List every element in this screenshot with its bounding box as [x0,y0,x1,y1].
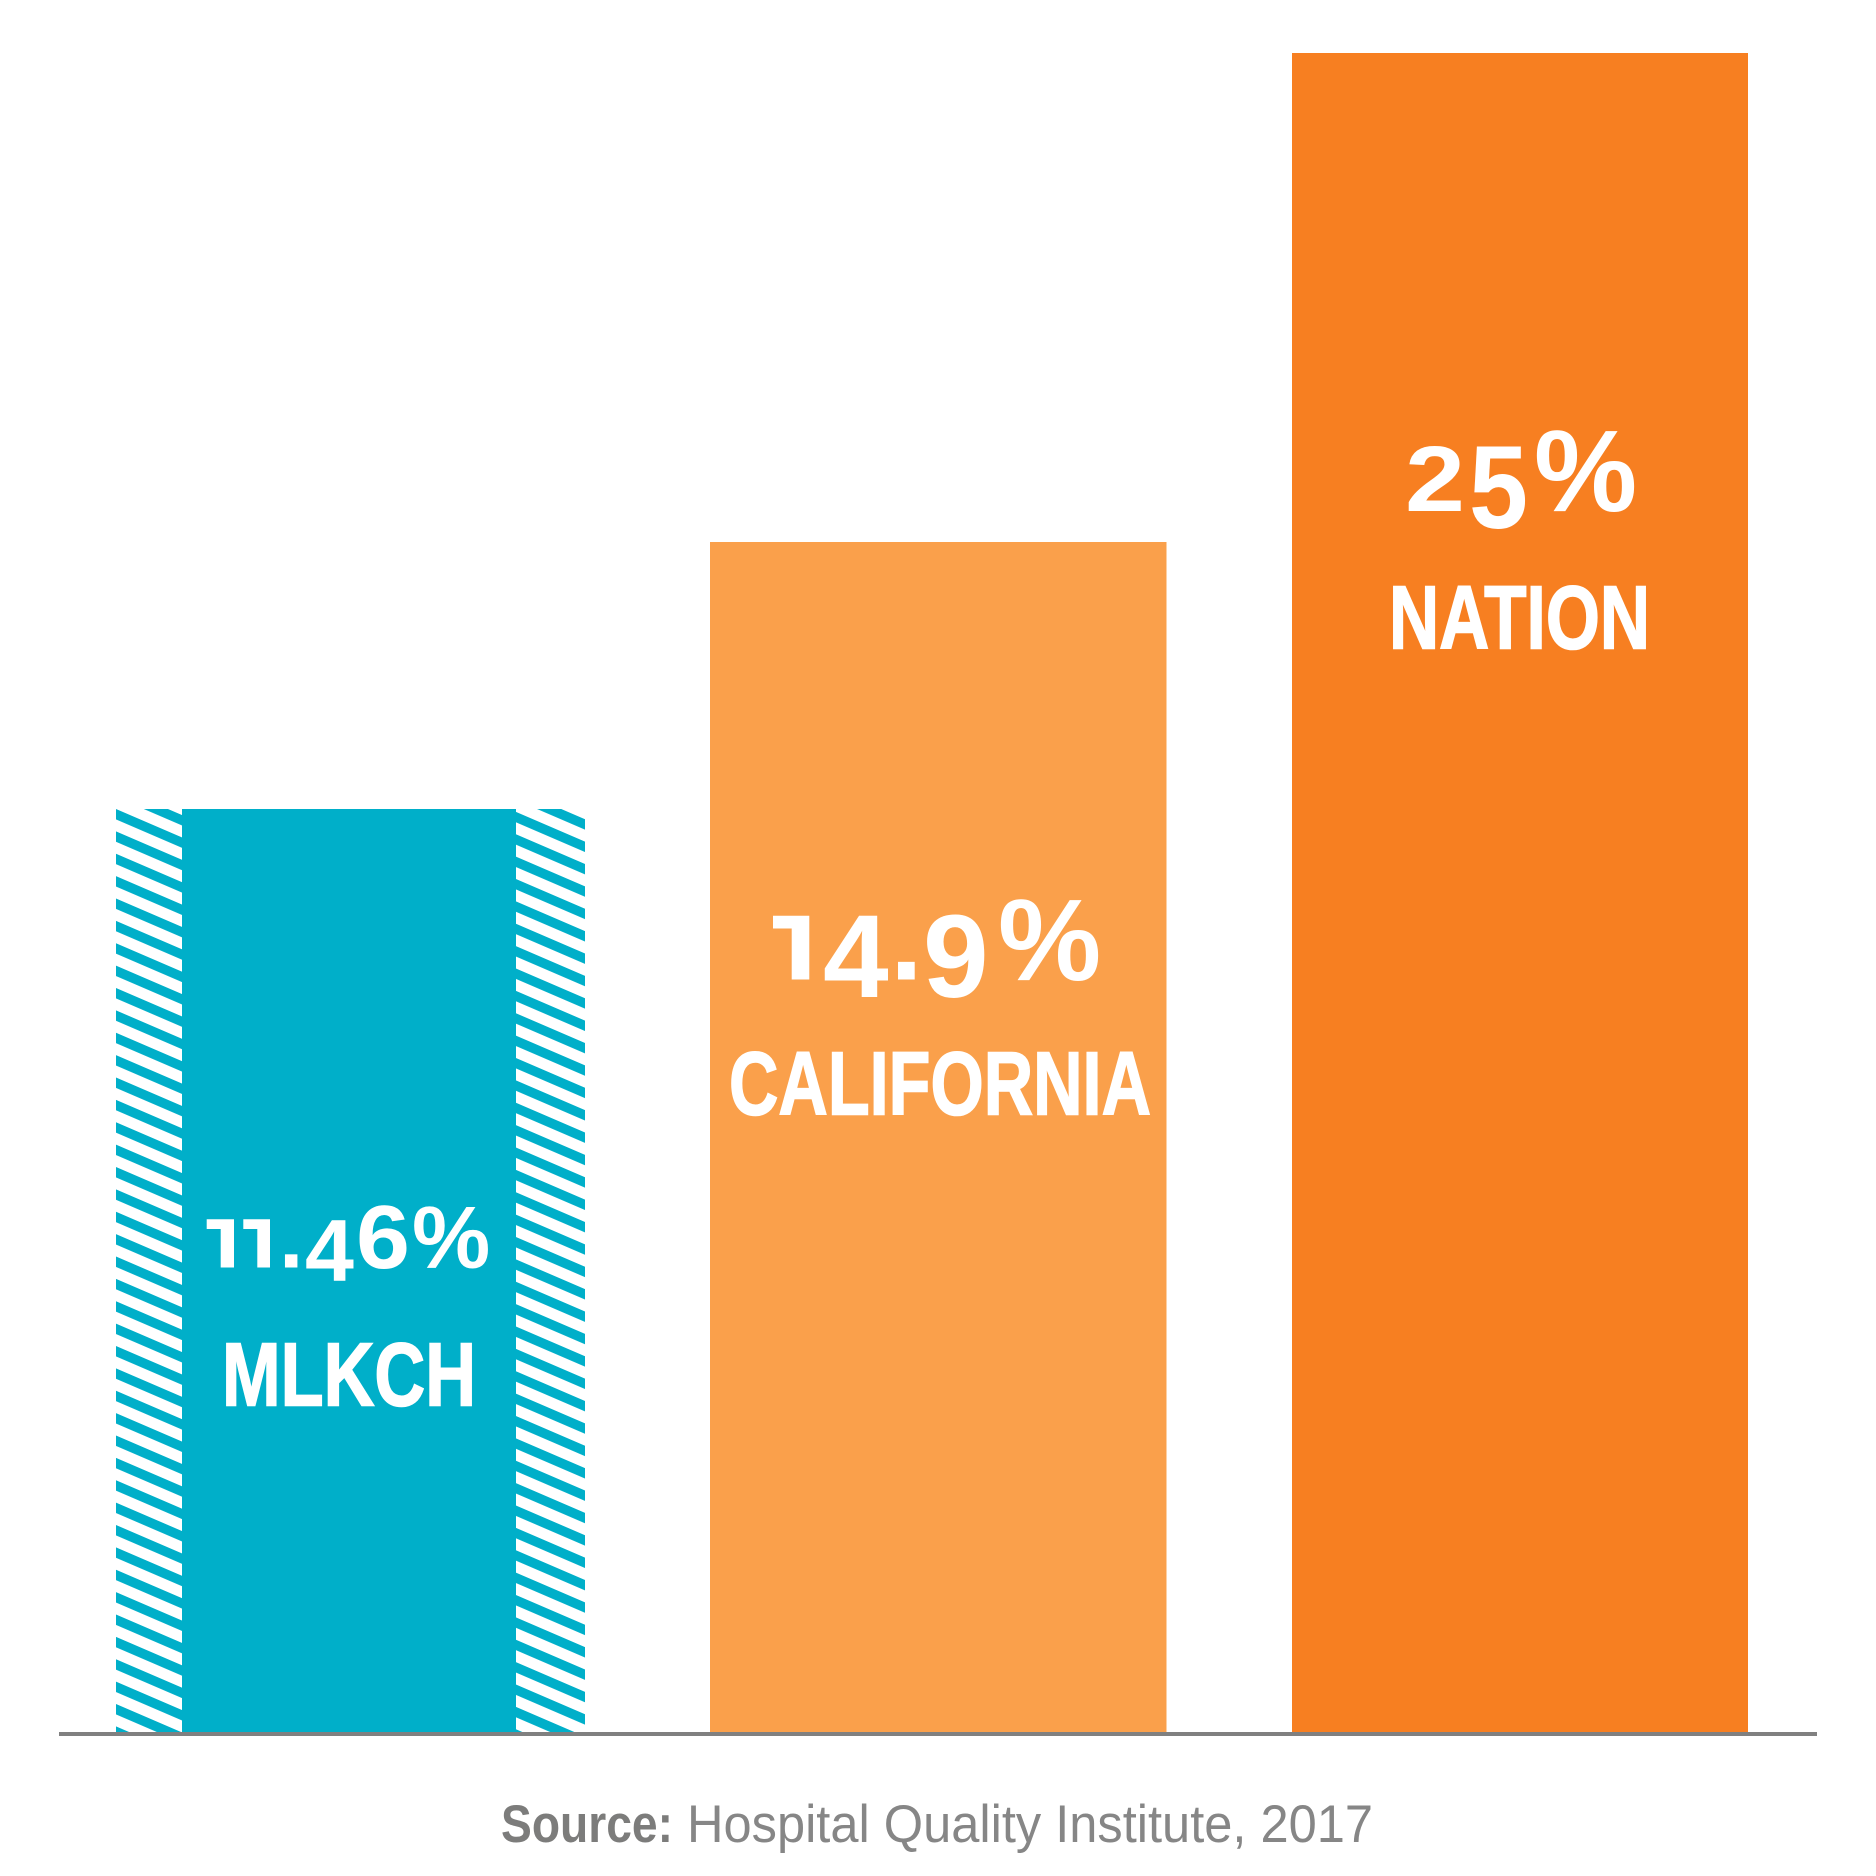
value: 11.46%: 1 [205,1206,243,1283]
label: California: CALIFORNIA [729,1034,1151,1134]
value: 14.9%: 9 [923,891,989,1023]
value: 11.46%: 1 [241,1206,279,1283]
bar: California [710,542,1166,1733]
value: 14.9%: 1 [768,898,819,1000]
value: 25%: % [1534,406,1637,536]
baseline axis [59,1732,1817,1736]
value: 11.46%: % [412,1188,490,1287]
value: 14.9%: 4 [823,891,889,1023]
value: 25%: 2 [1405,427,1465,531]
value: 11.46% [200,1188,490,1300]
source note: Source: [501,1795,673,1854]
bar: Nation [1292,53,1748,1733]
value: 11.46%: . [279,1188,303,1286]
source note: Hospital Quality Institute, 2017 [687,1795,1373,1854]
label: Nation: NATION [1389,568,1650,668]
value: 14.9% [762,874,1101,1023]
hatch: right side [516,809,585,1733]
hatch: left side [116,809,182,1733]
label: MLKCH: MLKCH [222,1326,476,1426]
value: 11.46%: 4 [305,1201,354,1300]
value: 14.9%: . [890,874,923,1006]
value: 11.46%: 6 [356,1188,410,1288]
value: 25%: 5 [1469,422,1528,554]
solid teal column [182,809,516,1733]
value: 14.9%: % [998,875,1101,1005]
bar: MLKCH [116,809,585,1733]
